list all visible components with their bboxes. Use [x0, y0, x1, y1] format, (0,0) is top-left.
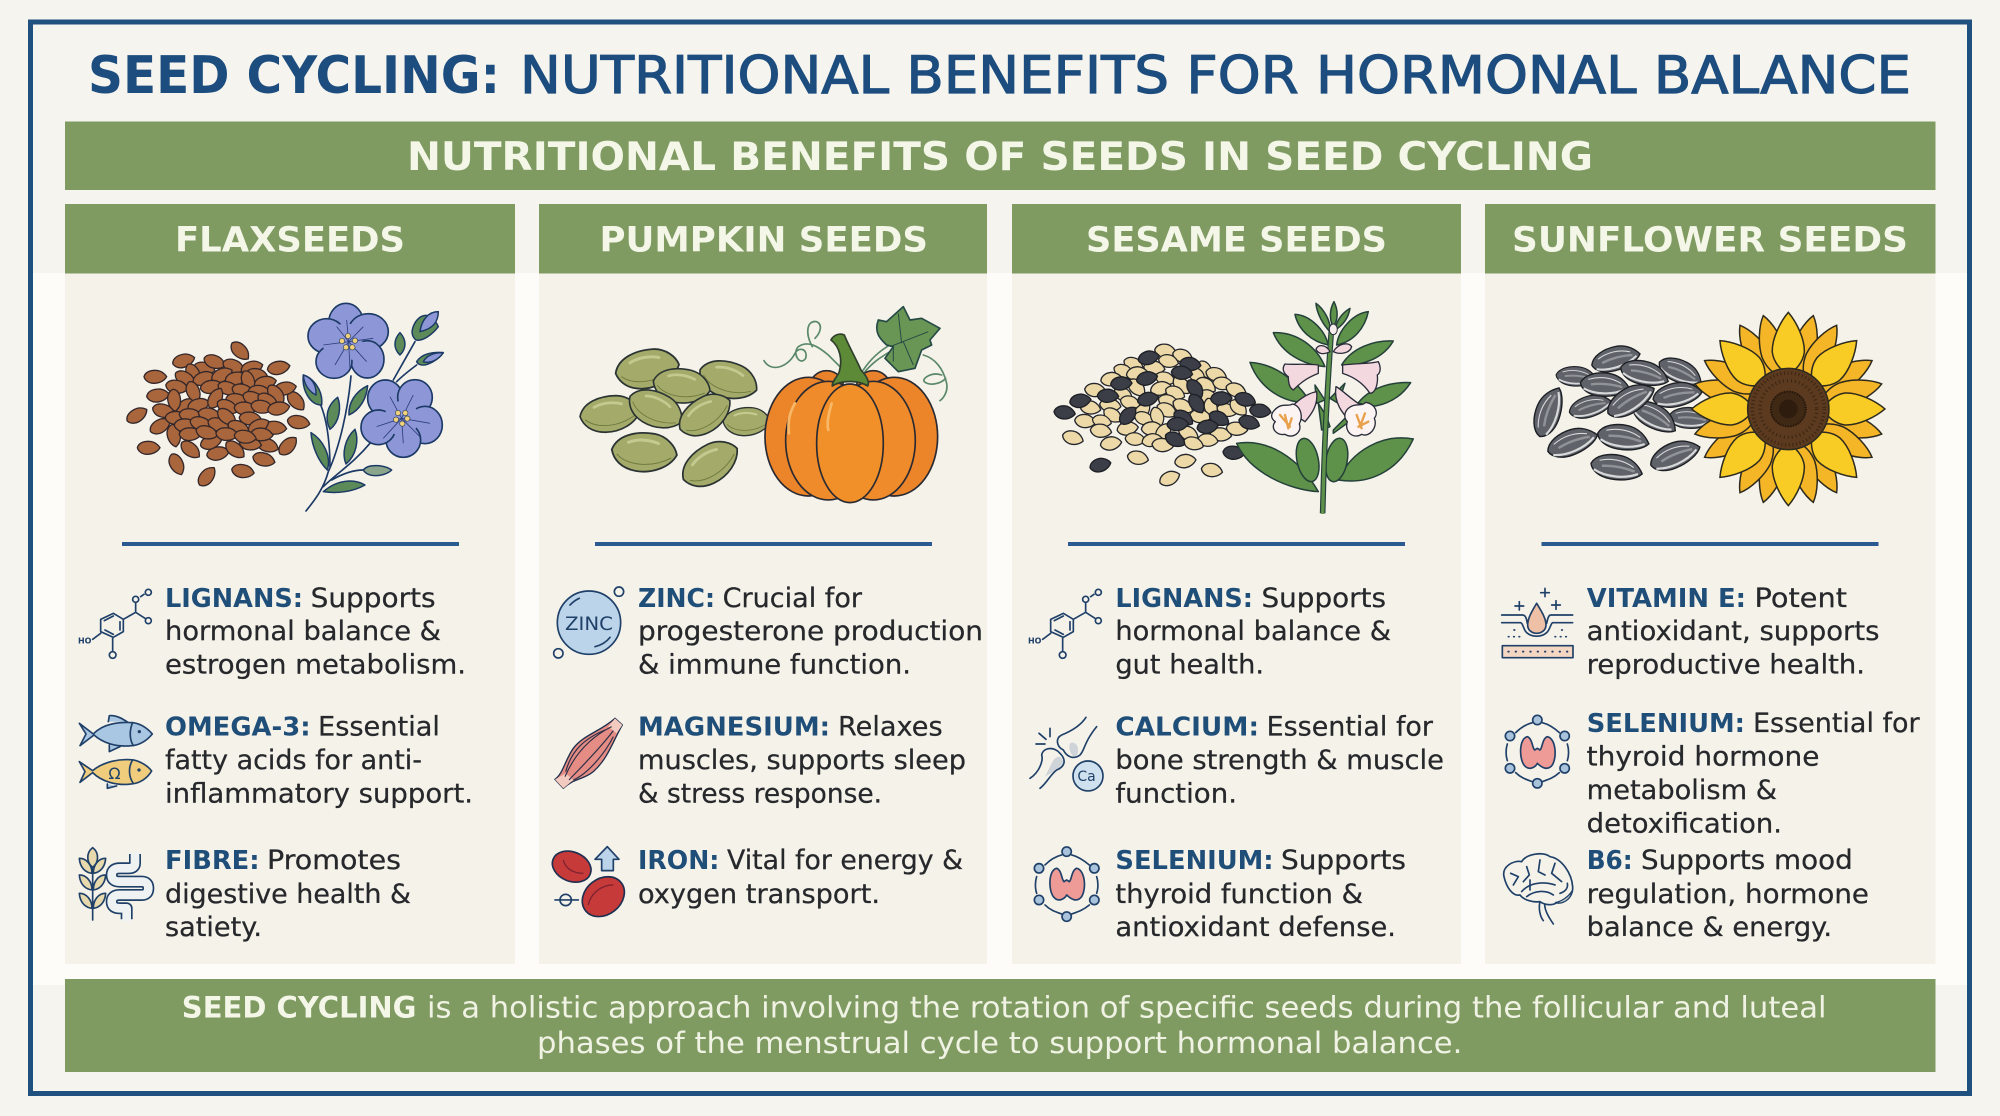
icon: zinc circle — [554, 587, 624, 658]
panel: sesame seeds — [1012, 204, 1461, 964]
benefit: magnesium: MAGNESIUM: — [638, 712, 830, 742]
illustration: flax seeds and flowers — [124, 303, 443, 511]
sunflower seeds header: SUNFLOWER SEEDS — [1512, 220, 1908, 260]
pumpkin seeds header — [539, 204, 987, 274]
divider — [1068, 542, 1405, 546]
benefit: iron — [548, 845, 963, 925]
benefit: lignans: Supports — [311, 583, 436, 614]
benefit: iron: Vital for energy & — [727, 845, 963, 876]
benefit: lignans: hormonal balance & — [165, 616, 441, 647]
benefit: zinc: progesterone production — [638, 616, 983, 647]
benefit: vitamin e: reproductive health. — [1587, 650, 1865, 680]
benefit: selenium: SELENIUM: — [1587, 709, 1745, 739]
divider — [1542, 542, 1878, 546]
icon: fish: Ω — [108, 764, 121, 783]
divider — [595, 542, 932, 546]
benefit: selenium: thyroid function & — [1115, 879, 1363, 910]
icon: lignan molecule: HO — [78, 636, 92, 645]
benefit: lignans: LIGNANS: — [165, 584, 303, 614]
icon: muscle — [555, 718, 622, 788]
benefit: calcium: CALCIUM: — [1115, 712, 1259, 742]
benefit: fibre: digestive health & — [165, 879, 411, 910]
leaf — [877, 307, 940, 372]
benefit: b6: regulation, hormone — [1587, 879, 1869, 910]
benefit: selenium: Essential for — [1753, 708, 1920, 739]
panel: flaxseeds — [65, 204, 515, 964]
benefit: selenium: metabolism & — [1587, 775, 1777, 806]
benefit: zinc — [554, 583, 983, 680]
icon: lignan molecule: HO — [1028, 636, 1042, 645]
inner gutter background — [33, 273, 1967, 985]
footer banner — [65, 979, 1936, 1072]
sunflower seeds header — [1485, 204, 1936, 274]
panel: sunflower seeds — [1485, 204, 1936, 964]
footer banner: is a holistic approach involving the rotation of specific seeds during the follicular and luteal — [427, 990, 1826, 1024]
benefit: selenium — [1505, 708, 1920, 840]
title: NUTRITIONAL BENEFITS FOR HORMONAL BALANCE — [520, 46, 1911, 106]
benefit: iron: IRON: — [638, 846, 719, 876]
benefit: omega-3: OMEGA-3: — [165, 712, 311, 742]
flaxseeds header: FLAXSEEDS — [175, 220, 405, 260]
benefit: lignans: Supports — [1262, 583, 1386, 614]
sesame seeds header: SESAME SEEDS — [1086, 220, 1387, 260]
benefit: lignans — [78, 583, 466, 680]
benefit: lignans: LIGNANS: — [1115, 584, 1253, 614]
icon: thyroid — [1505, 715, 1569, 788]
sesame seeds header — [1012, 204, 1461, 274]
icon: lignan molecule — [1028, 589, 1101, 658]
section banner — [65, 122, 1936, 190]
icon: bone joint — [1030, 717, 1103, 791]
icon: red blood cells — [548, 846, 632, 925]
benefit: fibre: FIBRE: — [165, 846, 260, 876]
benefit: iron: oxygen transport. — [638, 879, 880, 910]
benefit: b6: balance & energy. — [1587, 912, 1832, 943]
illustration: sesame seeds and plant — [1053, 302, 1413, 514]
benefit: magnesium: & stress response. — [638, 778, 882, 810]
benefit: zinc: Crucial for — [723, 583, 862, 614]
benefit: calcium: Essential for — [1267, 712, 1433, 742]
benefit: fibre — [79, 845, 411, 943]
benefit: zinc: ZINC: — [638, 584, 715, 614]
benefit: lignans — [1028, 583, 1391, 680]
benefit: lignans: hormonal balance & — [1115, 616, 1391, 647]
divider — [122, 542, 459, 546]
benefit: selenium: SELENIUM: — [1115, 846, 1274, 876]
benefit: vitamin e: VITAMIN E: — [1587, 584, 1746, 614]
benefit: calcium — [1030, 712, 1444, 810]
pumpkin seeds header: PUMPKIN SEEDS — [600, 220, 928, 260]
illustration: sunflower and seeds — [1528, 312, 1885, 506]
benefit: vitamin e: Potent — [1754, 583, 1847, 614]
icon: bone joint: Ca — [1077, 769, 1096, 785]
benefit: vitamin e: antioxidant, supports — [1587, 616, 1880, 647]
icon: skin droplet — [1502, 588, 1573, 658]
benefit: fibre: satiety. — [165, 912, 262, 943]
footer banner: SEED CYCLING — [182, 990, 416, 1024]
benefit: fibre: Promotes — [267, 845, 401, 876]
benefit: calcium: function. — [1115, 778, 1237, 810]
benefit: omega-3: fatty acids for anti- — [165, 745, 422, 776]
benefit: lignans: estrogen metabolism. — [165, 650, 466, 680]
section banner: NUTRITIONAL BENEFITS OF SEEDS IN SEED CYCLING — [407, 135, 1593, 180]
icon: thyroid — [1034, 847, 1099, 921]
benefit: magnesium — [555, 712, 966, 810]
benefit: b6 — [1504, 845, 1869, 943]
footer banner: phases of the menstrual cycle to support hormonal balance. — [537, 1026, 1462, 1060]
benefit: vitamin e — [1502, 583, 1880, 680]
benefit: selenium: detoxification. — [1587, 809, 1782, 840]
benefit: magnesium: muscles, supports sleep — [638, 745, 966, 776]
benefit: omega-3: Essential — [318, 712, 440, 742]
benefit: lignans: gut health. — [1115, 650, 1264, 680]
pumpkin stem — [831, 334, 868, 386]
benefit: selenium: thyroid hormone — [1587, 742, 1820, 773]
benefit: selenium: antioxidant defense. — [1115, 912, 1396, 943]
icon: zinc circle: ZINC — [565, 614, 613, 635]
icon: fish — [79, 716, 152, 788]
benefit: zinc: & immune function. — [638, 650, 911, 680]
panel: pumpkin seeds — [539, 204, 987, 964]
benefit: selenium: Supports — [1281, 845, 1406, 876]
benefit: b6: Supports mood — [1641, 845, 1853, 876]
illustration: pumpkin and seeds — [578, 307, 947, 503]
benefit: calcium: bone strength & muscle — [1115, 745, 1444, 776]
icon: wheat and intestine — [79, 848, 148, 921]
benefit: magnesium: Relaxes — [838, 712, 943, 742]
icon: brain — [1504, 854, 1573, 924]
benefit: b6: B6: — [1587, 846, 1633, 876]
benefit: omega-3: inflammatory support. — [165, 778, 473, 810]
icon: lignan molecule — [78, 589, 151, 658]
title: SEED CYCLING: — [88, 46, 500, 106]
flaxseeds header — [65, 204, 515, 274]
benefit: selenium — [1034, 845, 1406, 943]
benefit: omega-3 — [79, 712, 473, 810]
